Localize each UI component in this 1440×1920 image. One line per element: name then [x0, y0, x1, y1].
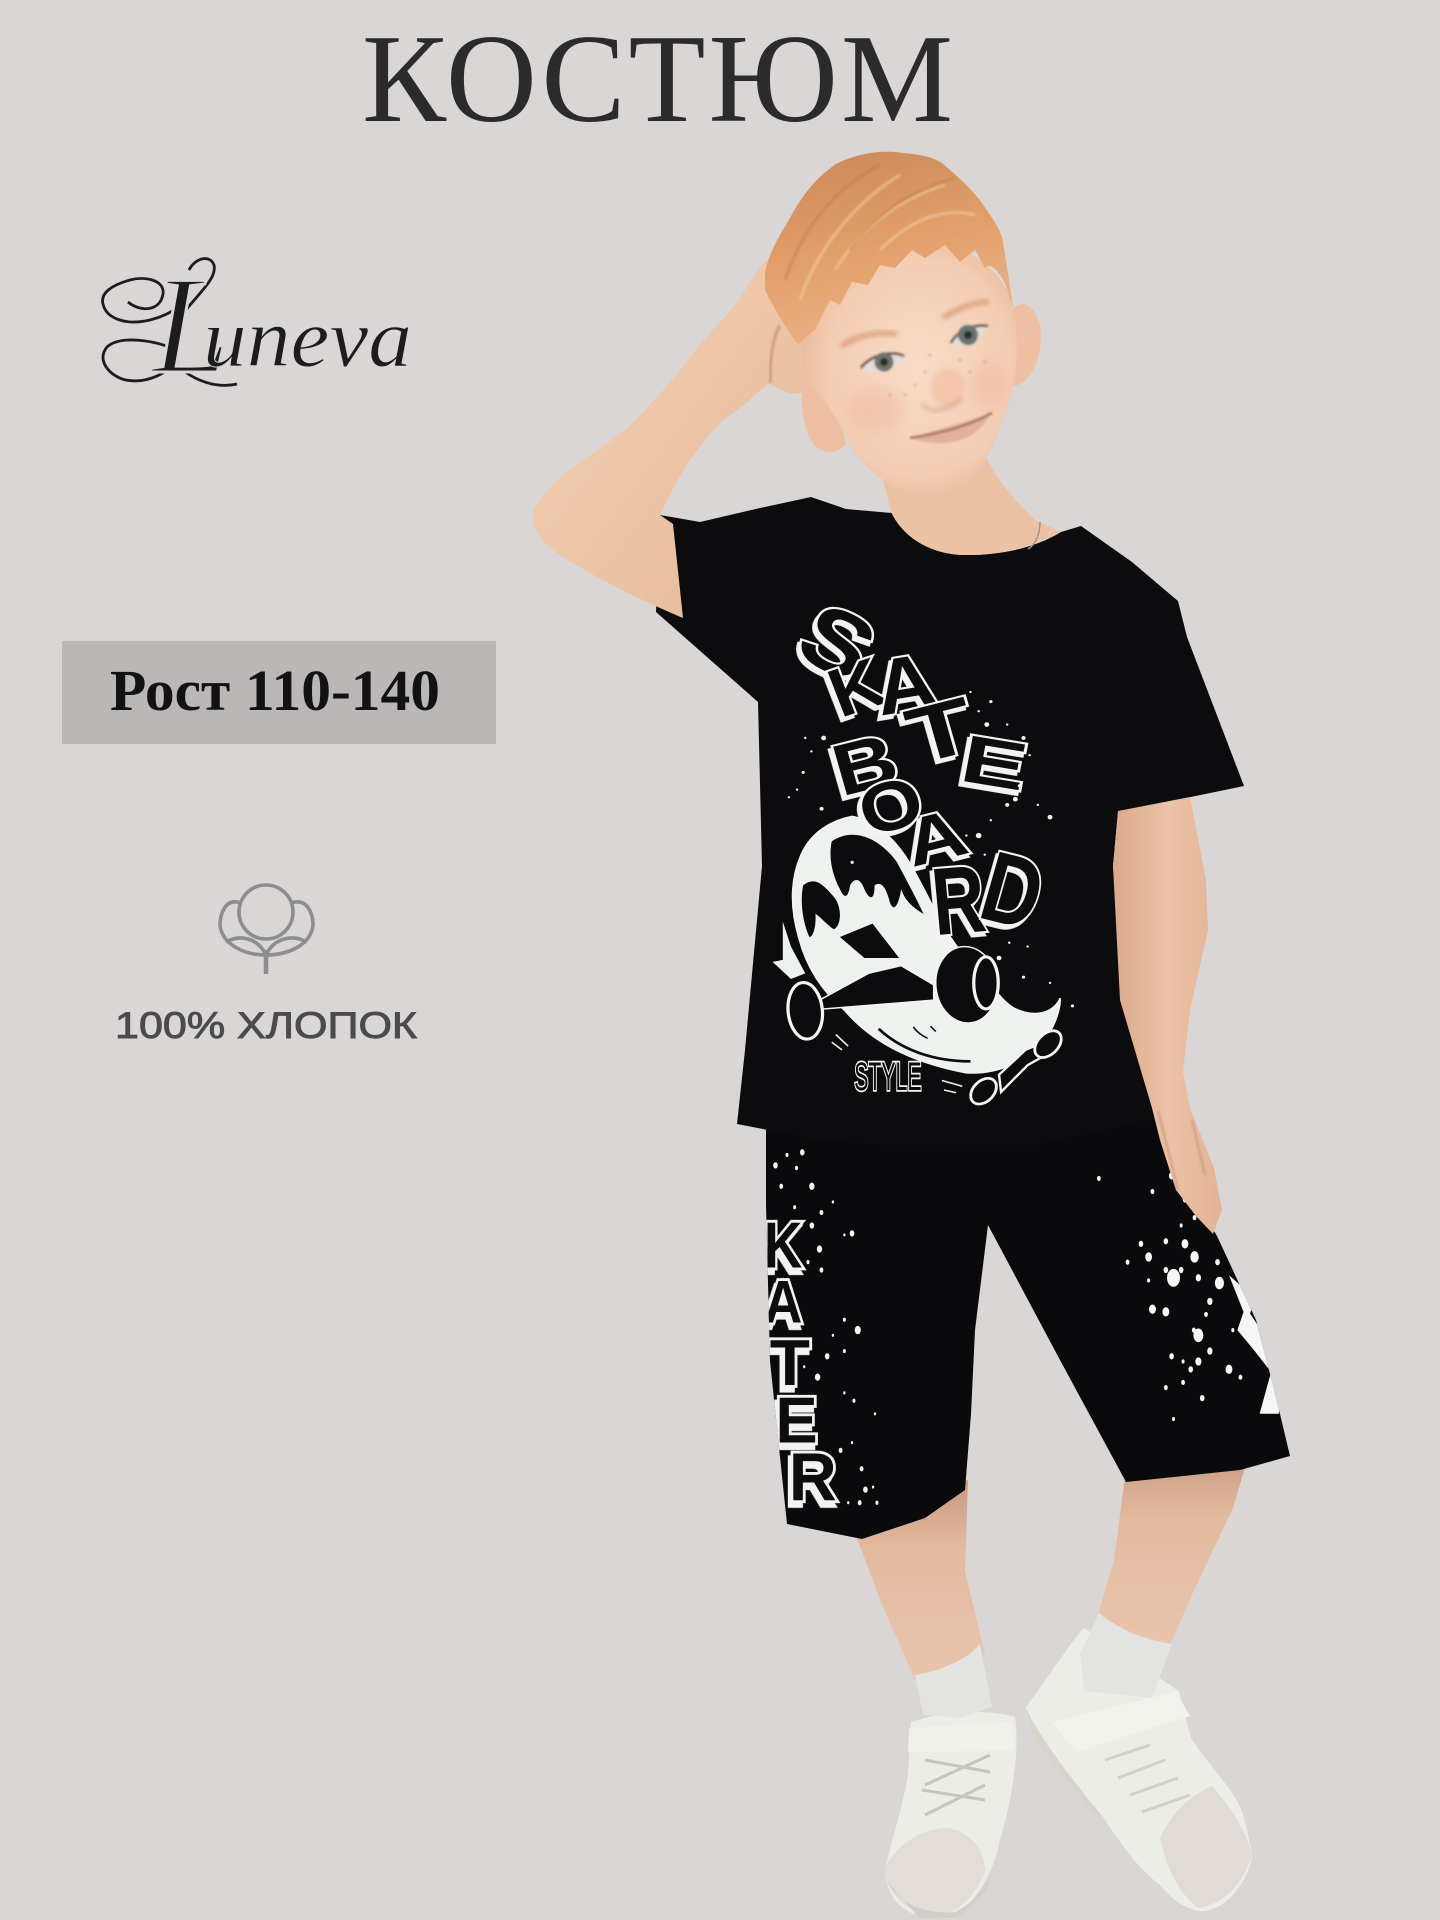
head and face	[800, 240, 1017, 495]
t-shirt skateboard print: STYLE	[854, 1053, 922, 1099]
height badge	[62, 641, 496, 744]
neck	[880, 455, 1061, 555]
shorts left-leg print: A	[764, 1269, 802, 1336]
brand logo: Luneva	[103, 248, 412, 403]
mouth	[910, 413, 992, 443]
socks	[915, 1613, 1172, 1718]
right eye	[951, 325, 988, 347]
graffiti word SKATE: R	[927, 844, 990, 955]
graffiti word SKATE: K	[818, 644, 896, 733]
motion marks	[773, 922, 805, 979]
t-shirt	[656, 497, 1244, 1146]
flames	[831, 835, 924, 914]
material label: 100% ХЛОПОК	[115, 1005, 418, 1046]
eyebrows	[841, 333, 897, 346]
shorts left-leg print	[764, 1149, 878, 1515]
cheek blush	[847, 388, 903, 432]
left shoe	[885, 1712, 1017, 1918]
shorts left-leg print: R	[789, 1438, 837, 1515]
print splatter	[788, 691, 1074, 1007]
rear truck	[999, 1042, 1048, 1092]
graffiti word SKATE: A	[867, 637, 944, 733]
nose	[922, 368, 965, 410]
shorts lightning print	[1229, 1275, 1283, 1414]
shorts	[764, 1105, 1290, 1539]
height badge: Рост 110-140	[110, 658, 440, 723]
graffiti word SKATE: O	[848, 761, 934, 852]
icon: cotton boll	[220, 885, 313, 974]
boy figure	[532, 152, 1290, 1918]
right shoe	[1026, 1628, 1252, 1911]
graffiti word SKATE: E	[955, 720, 1033, 805]
graffiti word SKATE	[782, 584, 1056, 955]
right arm	[1113, 797, 1222, 1234]
shorts left-leg print: K	[764, 1209, 802, 1282]
left eye	[861, 352, 904, 372]
brand logo: Luneva: uneva	[203, 292, 412, 385]
brand logo: Luneva: L	[150, 248, 230, 403]
shorts right-leg splatter	[1097, 1172, 1283, 1421]
graffiti word SKATE: T	[897, 681, 984, 781]
title: КОСТЮМ	[362, 10, 953, 149]
graffiti word BOARD: B	[823, 718, 907, 811]
graffiti word SKATE: A	[895, 793, 975, 881]
graffiti word SKATE: S	[782, 584, 892, 701]
shorts left-leg print: E	[775, 1384, 818, 1457]
legs	[850, 1450, 1250, 1680]
graffiti word SKATE: D	[970, 830, 1056, 951]
raised left arm	[532, 252, 807, 618]
hair	[765, 152, 1013, 344]
shorts left-leg print: T	[770, 1327, 810, 1400]
deck	[792, 816, 1060, 1073]
ears	[802, 304, 1041, 452]
freckles	[888, 353, 987, 397]
front wheel and truck	[815, 966, 934, 1010]
t-shirt skateboard print	[773, 584, 1074, 1109]
